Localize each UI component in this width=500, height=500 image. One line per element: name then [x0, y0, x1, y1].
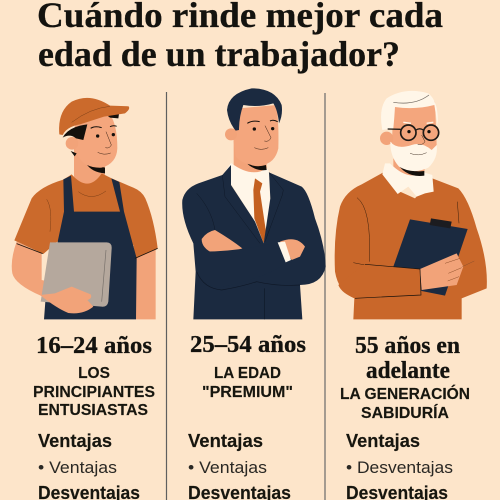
age heading	[355, 333, 460, 384]
group name	[340, 385, 470, 422]
column: 55 años en adelante	[340, 333, 470, 500]
group name: ENTUSIASTAS	[38, 402, 148, 419]
group name: PRINCIPIANTES	[33, 384, 155, 401]
age heading: 55 años en	[355, 333, 460, 359]
illustration: senior worker	[335, 91, 487, 319]
pros and cons: Ventajas	[346, 431, 420, 451]
illustration: businessman	[182, 88, 326, 319]
group name	[202, 365, 293, 401]
pros and cons: • Ventajas	[38, 458, 117, 477]
column: 25–54 años	[188, 332, 306, 500]
pros and cons: Ventajas	[188, 431, 263, 451]
age heading: 25–54 años	[190, 332, 306, 358]
age heading: 16–24 años	[36, 333, 152, 359]
group name: LA GENERACIÓN	[340, 385, 470, 403]
title: edad de un trabajador?	[38, 34, 400, 74]
pros and cons: • Ventajas	[188, 458, 267, 477]
group name: SABIDURÍA	[361, 405, 449, 422]
title	[37, 0, 443, 74]
age heading: adelante	[366, 358, 450, 384]
pros and cons	[346, 431, 453, 500]
group name: LA EDAD	[214, 365, 281, 382]
pros and cons	[38, 431, 140, 500]
pros and cons: Ventajas	[38, 431, 112, 451]
illustration: young worker	[12, 98, 158, 319]
column: 16–24 años	[33, 333, 155, 500]
group name: LOS	[78, 365, 110, 382]
group name	[33, 365, 155, 419]
group name: "PREMIUM"	[202, 384, 293, 401]
pros and cons	[188, 431, 291, 500]
pros and cons: • Desventajas	[346, 458, 453, 477]
